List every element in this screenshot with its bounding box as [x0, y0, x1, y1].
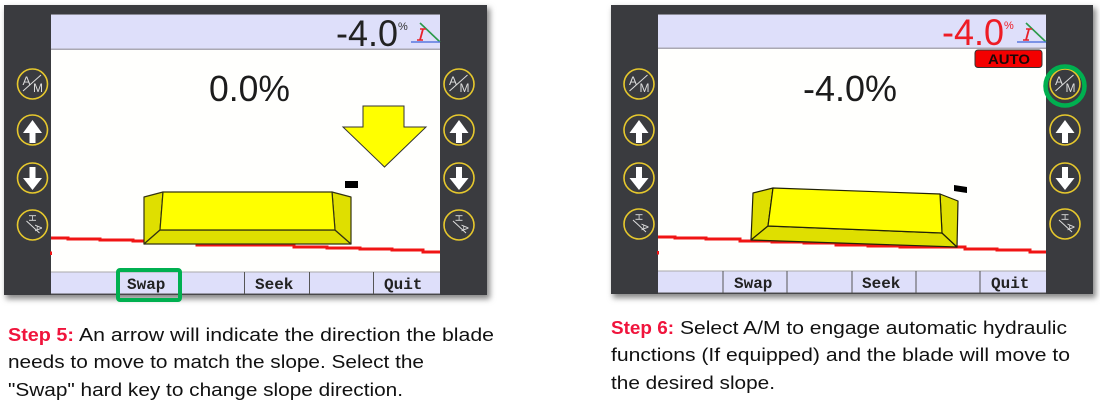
icon: A/M left	[624, 69, 654, 99]
blade marker	[345, 181, 358, 188]
soft key bar: Swap	[734, 275, 772, 293]
icon: H/A left	[624, 209, 654, 239]
text block: step 5: "Swap" hard key to change slope direction.	[8, 379, 403, 400]
icon: H/A right: H	[1058, 213, 1070, 221]
text block: step 5: needs to move to match the slope. Select the	[8, 351, 424, 372]
icon: up right	[1050, 115, 1080, 145]
blade marker	[954, 185, 967, 193]
icon: H/A right	[444, 210, 474, 240]
percent sign small: %	[1004, 20, 1014, 32]
icon: A/M right: A	[449, 74, 457, 88]
icon: A/M left	[18, 69, 48, 99]
icon: H/A right	[1050, 209, 1080, 239]
icon: up left	[624, 115, 654, 145]
text block: step 6: the desired slope.	[611, 372, 775, 393]
soft key bar: Swap	[127, 276, 165, 294]
icon: H/A right: A	[458, 225, 470, 232]
red ground line	[658, 237, 1046, 254]
soft key bar: Quit	[991, 275, 1029, 293]
icon: down left	[18, 163, 48, 193]
text block: step 6: Select A/M to engage automatic hydraulic	[680, 317, 1067, 338]
header bar	[658, 14, 1046, 49]
percent sign small: %	[398, 21, 408, 33]
icon: H/A left: H	[632, 213, 644, 221]
panel: step 6 device screen	[611, 5, 1096, 298]
soft key bar	[658, 271, 1046, 293]
text block: step 5: An arrow will indicate the direction the blade	[79, 324, 494, 345]
panel: step 5 device screen	[4, 5, 490, 300]
blade	[144, 192, 351, 244]
icon: A/M left: M	[640, 81, 650, 95]
icon: down left	[624, 163, 654, 193]
soft key bar	[51, 272, 440, 294]
text block: step 6: Step 6:	[611, 317, 674, 338]
icon: H/A left: A	[638, 224, 650, 231]
current slope value: 0.0%	[209, 68, 290, 109]
icon: A/M left: M	[33, 81, 43, 95]
icon: A/M right highlighted	[1046, 66, 1084, 106]
AUTO badge	[975, 50, 1042, 68]
blade tilted	[751, 188, 958, 247]
icon: A/M right highlighted: M	[1066, 81, 1076, 95]
soft key bar: Seek	[255, 276, 294, 294]
soft key bar: Seek	[862, 275, 901, 293]
current slope value: -4.0%	[803, 68, 897, 109]
text block: step 5	[8, 324, 494, 400]
icon: A/M left: A	[629, 74, 637, 88]
icon: up left	[18, 115, 48, 145]
text block: step 6: functions (If equipped) and the blade will move to	[611, 344, 1070, 365]
icon: up right	[444, 115, 474, 145]
icon: A/M right	[444, 69, 474, 99]
red ground line	[51, 238, 440, 255]
icon: A/M right: M	[460, 81, 470, 95]
slope readout: -4.0	[336, 13, 398, 54]
icon: yellow down arrow	[343, 106, 426, 167]
text block: step 6	[611, 317, 1070, 393]
icon: H/A right: H	[452, 214, 464, 222]
AUTO badge: AUTO	[988, 52, 1030, 67]
icon: down right	[1050, 163, 1080, 193]
icon: H/A left: H	[26, 214, 37, 222]
icon: H/A left	[18, 210, 48, 240]
icon: slope triangle	[411, 23, 440, 42]
icon: H/A left: A	[32, 225, 43, 232]
icon: H/A right: A	[1064, 224, 1076, 231]
icon: A/M right highlighted: A	[1055, 74, 1063, 88]
slope readout red: -4.0	[942, 12, 1004, 53]
header bar	[51, 14, 440, 50]
icon: A/M left: A	[22, 74, 31, 88]
highlight: Swap key	[118, 270, 180, 300]
icon: slope triangle	[1017, 23, 1046, 42]
soft key bar: Quit	[384, 276, 422, 294]
text block: step 5: Step 5:	[8, 324, 74, 345]
icon: down right	[444, 163, 474, 193]
